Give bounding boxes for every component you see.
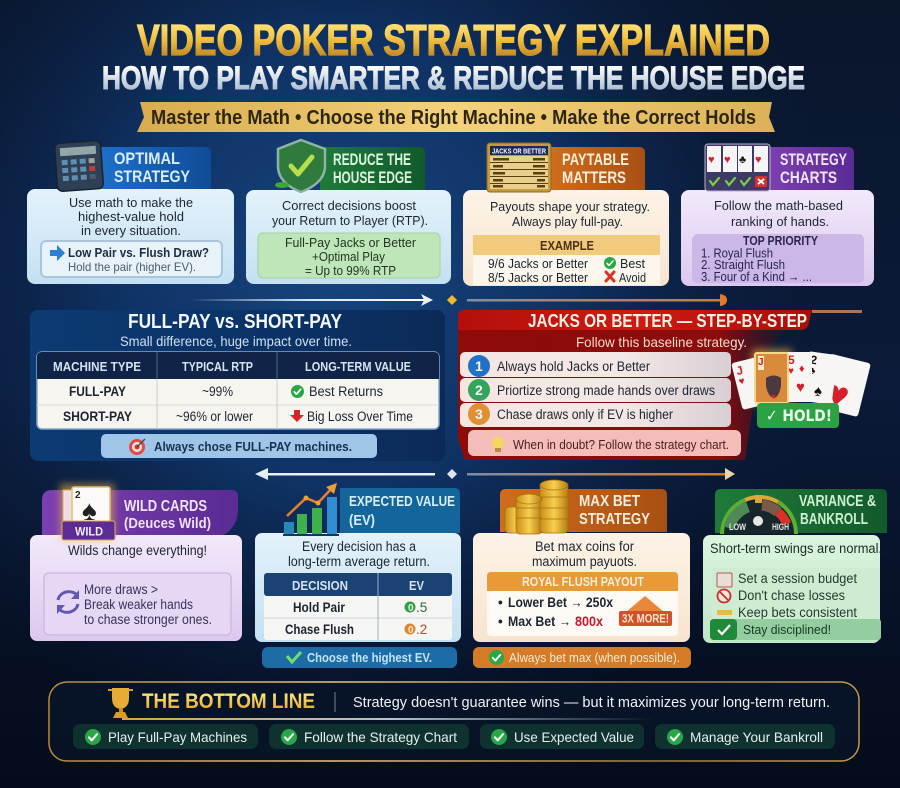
ev text: Every decision has a — [302, 539, 416, 554]
full-pay heading: FULL-PAY vs. SHORT-PAY — [128, 311, 343, 333]
icon: cards with check marks: ♥ — [708, 154, 715, 166]
paytable tab: PAYTABLE — [562, 150, 629, 169]
hint box — [468, 430, 741, 456]
gold banner: Master the Math • Choose the Right Machine • Make the Correct Holds — [151, 106, 756, 129]
max bet card — [473, 533, 690, 642]
top priority list: 3. Four of a Kind → ... — [701, 270, 812, 284]
icon: wild card — [60, 484, 115, 540]
full-pay background — [30, 310, 445, 461]
red backdrop — [458, 330, 785, 460]
top priority list: 1. Royal Flush — [701, 246, 773, 260]
ev text — [288, 539, 430, 569]
hold button — [757, 403, 839, 428]
paytable text: Always play full-pay. — [512, 214, 623, 229]
ev table — [264, 573, 452, 640]
icon: fan of cards: 2 — [810, 353, 818, 367]
ev tab — [340, 488, 460, 533]
stay disciplined bar: Stay disciplined! — [743, 622, 831, 637]
icon: fan of cards: 9 — [829, 357, 839, 372]
icon: cards with check marks: ♣ — [739, 154, 746, 166]
callout: low pair vs flush draw — [41, 241, 222, 277]
paytable example: Best — [620, 256, 645, 271]
icon: fan of cards: ♥ — [827, 370, 835, 382]
icon: wild card: 2 — [75, 490, 81, 501]
hold button: ✓ HOLD! — [766, 406, 832, 425]
optimal strategy tab: OPTIMAL — [114, 149, 180, 168]
comparison table: FULL-PAY — [69, 384, 126, 399]
red subheading: Follow this baseline strategy. — [576, 334, 747, 350]
callout: low pair vs flush draw: Hold the pair (higher EV). — [68, 260, 196, 274]
wild cards callout: More draws > — [84, 582, 158, 597]
royal flush payout box: Max Bet → — [508, 614, 571, 629]
icon: fan of cards: ♥ — [821, 372, 854, 419]
house edge tab — [320, 147, 425, 190]
takeaway pill: strategy chart: Follow the Strategy Chart — [304, 729, 457, 745]
ev tab: EXPECTED VALUE — [349, 493, 455, 510]
icon: fan of cards: J — [735, 363, 744, 378]
ev tab: (EV) — [349, 512, 375, 529]
paytable tab: MATTERS — [562, 168, 626, 187]
icon: fan of cards — [731, 349, 871, 422]
variance tab — [715, 489, 887, 533]
rtp formula box: Full-Pay Jacks or Better — [285, 235, 417, 250]
paytable tab — [550, 147, 645, 190]
comparison table: ~99% — [202, 384, 233, 399]
charts card — [681, 190, 874, 286]
icon: gold coins — [505, 480, 568, 534]
paytable text — [490, 199, 650, 229]
house edge text — [272, 198, 428, 228]
ev table: EV — [409, 578, 424, 593]
royal flush payout box: ROYAL FLUSH PAYOUT — [522, 575, 644, 589]
max bet tab: MAX BET — [579, 493, 640, 510]
wild cards callout — [44, 573, 231, 635]
optimal strategy text — [69, 195, 193, 238]
diamond: top connector — [447, 295, 457, 305]
comparison table: MACHINE TYPE — [53, 359, 141, 374]
steps list: Chase draws only if EV is higher — [497, 407, 673, 422]
panel: paytable matters — [463, 143, 669, 286]
callout: low pair vs flush draw: Low Pair vs. Flush Draw? — [68, 245, 209, 260]
ev table: 0 — [408, 603, 414, 614]
house edge text: your Return to Player (RTP). — [272, 213, 428, 228]
wild cards callout: to chase stronger ones. — [84, 612, 212, 627]
takeaway pill: strategy chart — [269, 724, 469, 749]
icon: cards with check marks: ♥ — [724, 154, 731, 166]
icon: trophy — [108, 688, 133, 718]
royal flush payout box: 3X MORE! — [622, 614, 669, 626]
bankroll checklist: Set a session budget — [738, 571, 857, 586]
charts tab: CHARTS — [780, 168, 837, 187]
comparison table: Big Loss Over Time — [307, 409, 413, 424]
royal flush payout box: 800x — [575, 614, 603, 629]
takeaway pill: full-pay machines — [73, 724, 258, 749]
comparison table: Best Returns — [309, 384, 383, 399]
panel: the bottom line — [49, 682, 859, 761]
ev table: Chase Flush — [285, 622, 354, 637]
ev table: 0 — [408, 625, 414, 636]
ev text: long-term average return. — [288, 554, 430, 569]
variance card — [703, 535, 880, 643]
comparison table: LONG-TERM VALUE — [305, 359, 411, 374]
panel: full-pay vs short-pay — [30, 310, 445, 461]
tip button: Always chose FULL-PAY machines. — [154, 439, 352, 454]
house edge card — [246, 190, 451, 284]
tip button — [101, 434, 377, 458]
charts text — [714, 198, 843, 229]
ev card — [255, 533, 461, 642]
arrow: middle row to the right — [467, 468, 735, 480]
variance tab: BANKROLL — [800, 511, 868, 528]
optimal strategy card — [27, 189, 234, 284]
charts text: ranking of hands. — [731, 214, 829, 229]
royal flush payout box: Lower Bet → 250x — [508, 595, 613, 610]
paytable example: EXAMPLE — [540, 238, 594, 253]
bottom line statement: Strategy doesn't guarantee wins — but it maximizes your long-term return. — [353, 694, 830, 711]
paytable example: 8/5 Jacks or Better — [488, 270, 589, 285]
ev table: .2 — [416, 622, 427, 637]
icon: fan of cards: ♣ — [808, 365, 817, 377]
arrow: top row to the right — [190, 294, 433, 306]
stay disciplined bar — [710, 619, 881, 640]
icon: fan of cards: ♥ — [771, 392, 776, 401]
optimal strategy tab: STRATEGY — [114, 167, 191, 186]
ev button — [262, 647, 457, 668]
ev table: Hold Pair — [293, 600, 346, 615]
panel: optimal strategy — [27, 140, 234, 284]
wild cards card — [30, 535, 242, 641]
icon: wild card: ♠ — [82, 495, 97, 526]
bankroll checklist: Don't chase losses — [738, 588, 845, 603]
paytable text: Payouts shape your strategy. — [490, 199, 650, 214]
comparison table — [37, 352, 439, 429]
diamond: middle connector — [447, 469, 457, 479]
icon: rising chart — [283, 483, 339, 536]
panel: wild cards — [30, 484, 242, 641]
icon: calculator — [54, 140, 104, 192]
icon: fan of cards: ♥ — [788, 366, 794, 377]
rtp formula box: = Up to 99% RTP — [305, 263, 396, 278]
max bet tab — [500, 489, 667, 532]
wild cards text: Wilds change everything! — [68, 543, 207, 558]
panel: reduce the house edge — [246, 140, 451, 284]
top priority list — [692, 234, 864, 284]
panel: expected value — [255, 483, 461, 668]
icon: wild card: WILD — [75, 524, 103, 538]
icon: gauge: LOW — [729, 522, 746, 532]
panel: jacks or better — [458, 310, 871, 460]
icon: shield with check — [275, 140, 325, 192]
rtp formula box — [258, 233, 440, 278]
rtp formula box: +Optimal Play — [312, 249, 385, 264]
max bet tab: STRATEGY — [579, 511, 650, 528]
red heading band: JACKS OR BETTER — STEP-BY-STEP — [528, 311, 807, 331]
bankroll checklist — [712, 568, 880, 620]
max bet button — [473, 647, 691, 668]
comparison table: SHORT-PAY — [63, 409, 132, 424]
royal flush payout box: • — [498, 614, 503, 629]
icon: paytable: JACKS OR BETTER — [492, 148, 546, 156]
steps list — [460, 352, 731, 427]
max bet text — [532, 539, 637, 569]
optimal strategy text: in every situation. — [81, 223, 181, 238]
max bet button: Always bet max (when possible). — [509, 650, 680, 665]
icon: paytable — [487, 143, 551, 192]
bottom line heading: THE BOTTOM LINE — [142, 690, 315, 713]
icon: cards with check marks: ♥ — [755, 154, 762, 166]
takeaway pill: bankroll: Manage Your Bankroll — [690, 729, 823, 745]
optimal strategy text: Use math to make the — [69, 195, 193, 210]
icon: fan of cards: J — [758, 357, 764, 368]
arrow: middle row to the left — [255, 468, 435, 480]
optimal strategy text: highest-value hold — [78, 209, 184, 224]
charts text: Follow the math-based — [714, 198, 843, 213]
bottom line frame — [49, 682, 859, 761]
bankroll checklist: Keep bets consistent — [738, 605, 857, 620]
icon: fan of cards: 5 — [788, 353, 795, 367]
house edge text: Correct decisions boost — [282, 198, 416, 213]
arrow: top row right side — [467, 294, 727, 306]
wild cards tab — [42, 490, 238, 537]
panel: variance and bankroll — [703, 489, 887, 643]
full-pay subheading: Small difference, huge impact over time. — [120, 333, 352, 349]
paytable example: Avoid — [619, 270, 646, 285]
paytable example — [473, 235, 660, 285]
comparison table: ~96% or lower — [176, 409, 253, 424]
charts tab: STRATEGY — [780, 150, 847, 169]
icon: gauge: HIGH — [772, 522, 789, 532]
max bet text: maximum payuots. — [532, 554, 637, 569]
ev table: .5 — [416, 600, 427, 615]
royal flush payout box — [487, 572, 678, 636]
paytable card — [463, 190, 669, 286]
icon: cards with check marks — [705, 144, 770, 191]
paytable example: 9/6 Jacks or Better — [488, 256, 589, 271]
steps list: 3 — [475, 406, 483, 422]
icon: fan of cards: ♥ — [796, 379, 805, 396]
icon: gauge — [722, 495, 796, 534]
takeaway pill: expected value: Use Expected Value — [514, 729, 634, 745]
max bet text: Bet max coins for — [535, 539, 634, 554]
takeaway pill: expected value — [480, 724, 644, 749]
house edge tab: REDUCE THE — [333, 150, 411, 169]
icon: fan of cards: ♠ — [813, 382, 823, 400]
wild cards tab: WILD CARDS — [124, 498, 207, 515]
wild cards callout: Break weaker hands — [84, 597, 193, 612]
takeaway pill: bankroll — [655, 724, 835, 749]
wild cards tab: (Deuces Wild) — [124, 515, 211, 532]
panel: max bet — [473, 480, 691, 668]
steps list: 1 — [475, 358, 483, 374]
charts tab — [770, 147, 854, 190]
hint box: When in doubt? Follow the strategy chart. — [513, 437, 729, 452]
steps list: Priortize strong made hands over draws — [497, 383, 715, 398]
house edge tab: HOUSE EDGE — [333, 168, 412, 187]
panel: strategy charts — [681, 144, 874, 286]
optimal strategy tab — [100, 147, 211, 190]
ev button: Choose the highest EV. — [307, 650, 432, 665]
variance text: Short-term swings are normal. — [710, 541, 882, 556]
royal flush payout box: • — [498, 595, 503, 610]
steps list: Always hold Jacks or Better — [497, 359, 650, 374]
ev table: DECISION — [292, 578, 348, 593]
steps list: 2 — [475, 382, 483, 398]
icon: fan of cards: ♥ — [738, 376, 746, 388]
icon: fan of cards: ♦ — [799, 363, 805, 375]
top priority list: TOP PRIORITY — [743, 234, 819, 248]
comparison table: TYPICAL RTP — [182, 359, 253, 374]
variance tab: VARIANCE & — [799, 493, 876, 510]
takeaway pill: full-pay machines: Play Full-Pay Machines — [108, 729, 247, 745]
top priority list: 2. Straight Flush — [701, 258, 785, 272]
